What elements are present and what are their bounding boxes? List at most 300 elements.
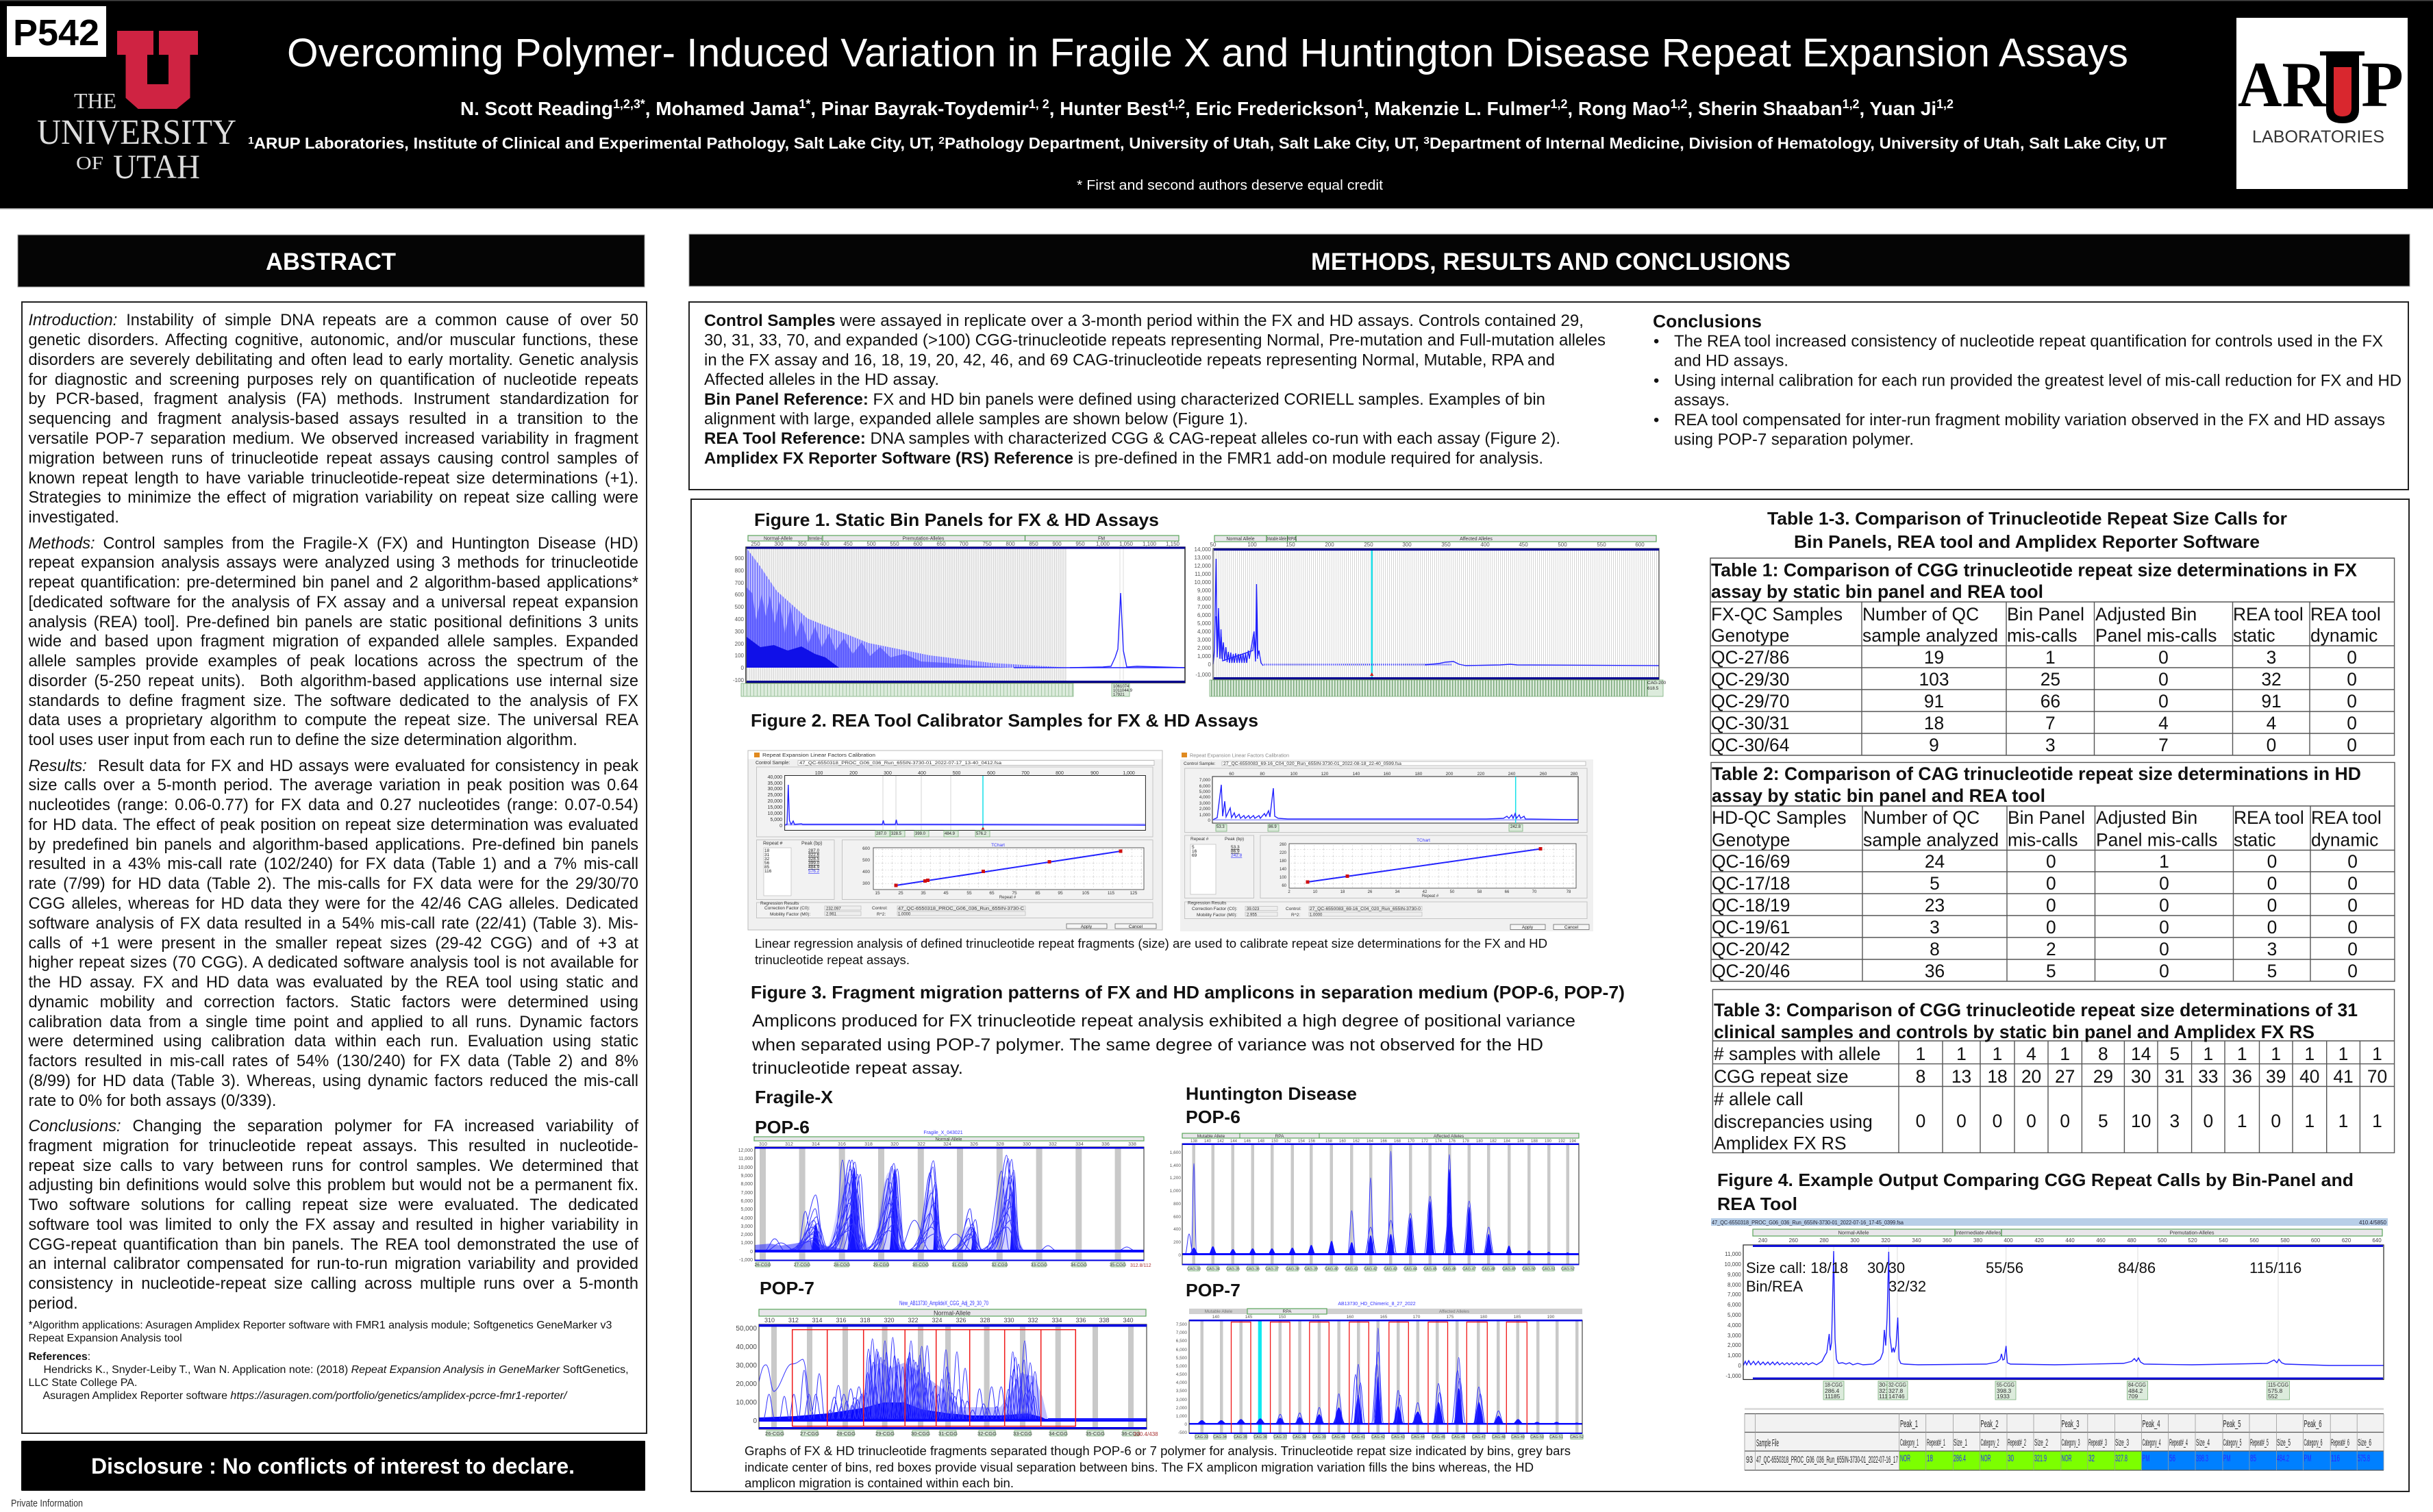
caption: figure 3: indicate center of bins, red boxes provide visual separation between bins. The FX amplicon migration variation fills the bins whereas, the HD [745, 1460, 1534, 1474]
peak labels: 115-CGG [2268, 1381, 2288, 1388]
chart: figure 4 example electropherogram: 520 [2188, 1237, 2197, 1244]
chart: Fragile X POP-7 overlay: 20,000 [736, 1381, 757, 1388]
chart: figure 2 HD calibration dialog: 39.023 [1247, 907, 1260, 911]
chart: figure 2 HD calibration dialog: 100 [1280, 876, 1287, 880]
chart: figure 1 FX static bin panel: 1,000 [1096, 541, 1110, 547]
chart: Fragile X POP-7 overlay: 310 [764, 1317, 775, 1324]
chart: Fragile X POP-6 overlay: 318 [864, 1142, 873, 1147]
size-call annotations: 115/116 [2249, 1259, 2301, 1276]
chart: Huntington POP-6 overlay: 168 [1394, 1139, 1401, 1144]
chart: figure 1 HD static bin panel: 7,000 [1197, 604, 1212, 610]
peak labels: 709 [2128, 1393, 2138, 1400]
chart: Fragile X POP-7 overlay: 318 [860, 1317, 871, 1324]
chart: figure 1 HD static bin panel: CAG-200 [1647, 681, 1666, 685]
chart: Huntington POP-6 overlay: 140 [1204, 1139, 1212, 1144]
chart: figure 2 FX calibration dialog: 125 [1130, 891, 1138, 896]
text: abstract body: genetic disorders. Affecting cognitive, autonomic, and/or muscular functions, these [29, 331, 638, 349]
text: abstract body [29, 312, 638, 1313]
chart: Huntington POP-7 overlay: CAG-46 [1451, 1435, 1465, 1439]
chart: figure 2 HD calibration dialog: 140 [1280, 868, 1287, 872]
chart: figure 2 FX calibration dialog: Mobility Factor (M0): [770, 912, 810, 917]
chart: figure 1 FX static bin panel: 450 [843, 541, 853, 547]
chart: figure 2 FX calibration dialog: Cancel [1129, 924, 1143, 929]
table: figure 4 peak output grid: Sample File [1756, 1437, 1779, 1449]
chart: Fragile X POP-6 overlay: 3,000 [740, 1224, 753, 1229]
authors: , Rong Mao [1567, 98, 1671, 119]
table 1: Bin Panel [2007, 604, 2084, 625]
chart: Huntington POP-6 overlay [1170, 1133, 1579, 1271]
chart: Huntington POP-6 overlay: 146 [1244, 1139, 1251, 1144]
table 1: QC-30/64 [1711, 735, 1789, 755]
chart: Huntington POP-6 overlay: CAG-47 [1462, 1267, 1476, 1271]
table 2: 5 [1930, 873, 1940, 894]
chart: Fragile X POP-7 overlay: 326 [956, 1317, 966, 1324]
chart: Fragile X POP-7 overlay: 36-CGG [1121, 1431, 1140, 1437]
chart: Huntington POP-6 overlay: 194 [1569, 1139, 1577, 1144]
table 1: REA tool [2310, 604, 2381, 625]
poster number: P542 [13, 12, 99, 53]
text: figure 3 description: Amplicons produced for FX trinucleotide repeat analysis exhibited a high degree of positional variance [752, 1011, 1575, 1031]
text: abstract body: factors resulted in mis-call rates of 54% (130/240) for FX data (Table 2) and 8% [29, 1053, 638, 1070]
chart: figure 4 example electropherogram: 47_QC-6550318_PROC_G06_036_Run_655IN-3730-01_2022-07-16_17-45_0399.fsa [1712, 1220, 1904, 1226]
chart: figure 4 example electropherogram: 300 [1850, 1237, 1860, 1244]
table 1: 0 [2347, 647, 2357, 668]
table 1: 91 [1924, 691, 1944, 711]
logo: University of Utah: UTAH [113, 147, 200, 186]
table 1 [1710, 558, 2395, 755]
table 3: 20 [2021, 1066, 2041, 1087]
chart: Huntington POP-6 overlay: 154 [1298, 1139, 1306, 1144]
chart: figure 2 HD calibration dialog: 0 [1208, 818, 1210, 823]
panel: methods and conclusions frame [689, 302, 2408, 490]
chart: Huntington POP-6 overlay: 186 [1517, 1139, 1525, 1144]
chart: Fragile X POP-7 overlay: 34-CGG [1049, 1431, 1068, 1437]
chart: figure 2 FX calibration dialog: 399.0 [808, 861, 820, 866]
table: figure 4 peak output grid: Repeat#_1 [1927, 1437, 1945, 1448]
table 3: 33 [2198, 1066, 2218, 1087]
chart: figure 1 FX static bin panel: -100 [733, 677, 745, 683]
table 3: 0 [2060, 1111, 2070, 1131]
table: figure 4 peak output grid: Category_1 [1900, 1437, 1919, 1448]
caption: figure 3 [745, 1444, 1571, 1490]
table 1: 7 [2158, 735, 2169, 755]
chart: figure 1 FX static bin panel: 300 [774, 541, 784, 547]
chart: Fragile X POP-6 overlay: 324 [943, 1142, 951, 1147]
chart: Huntington POP-6 overlay: 1,400 [1170, 1163, 1181, 1168]
chart: figure 2 HD calibration dialog: 18 [1340, 890, 1345, 894]
chart: figure 4 example electropherogram: 620 [2342, 1237, 2351, 1244]
table 2: 24 [1925, 851, 1945, 872]
table: figure 4 peak output grid: 321.9 [2034, 1452, 2047, 1463]
chart: Fragile X POP-6 overlay: 8,000 [740, 1182, 753, 1187]
disclosure banner: Disclosure : No conflicts of interest to declare. [91, 1454, 575, 1478]
table 1: 0 [2158, 691, 2169, 711]
chart: figure 1 HD static bin panel: 4,000 [1197, 629, 1212, 635]
table 1: Number of QC [1862, 604, 1979, 625]
chart: figure 2 FX calibration dialog: 18 [764, 848, 770, 853]
logo: ARUP Laboratories: AR [2238, 49, 2327, 121]
table 2: Number of QC [1863, 807, 1980, 828]
chart: Huntington POP-7 overlay: 0 [1184, 1422, 1187, 1427]
table 2: REA tool [2311, 807, 2382, 828]
chart: figure 2 HD calibration dialog: 7,000 [1199, 778, 1210, 783]
chart: figure 2 FX calibration dialog: 232.097 [826, 907, 841, 911]
label: Huntington Disease: Huntington Disease [1186, 1083, 1357, 1104]
chart: figure 2 FX calibration dialog: 10,000 [768, 811, 782, 816]
table 2: 0 [2267, 873, 2277, 894]
table 3: 31 [2164, 1066, 2184, 1087]
chart: figure 1 FX static bin panel: 900 [1052, 541, 1062, 547]
table 2: 0 [2267, 851, 2277, 872]
chart: figure 4 example electropherogram: 2,000 [1727, 1342, 1742, 1348]
chart: Huntington POP-6 overlay: CAG-39 [1304, 1267, 1318, 1271]
table: figure 4 peak output grid: Category_5 [2223, 1437, 2242, 1448]
peak labels: 84-CGG [2128, 1381, 2146, 1388]
chart: figure 2 HD calibration dialog [1180, 751, 1593, 931]
table 1: Adjusted Bin [2095, 604, 2197, 625]
chart: Huntington POP-7 overlay: 155 [1312, 1315, 1320, 1320]
peak labels [1823, 1381, 2289, 1400]
heading: tables 1-3 [1767, 508, 2287, 552]
chart: Huntington POP-7 overlay: CAG-47 [1472, 1435, 1486, 1439]
heading: tables 1-3: Table 1-3. Comparison of Trinucleotide Repeat Size Calls for [1767, 508, 2287, 529]
text: conclusions: The REA tool increased consistency of nucleotide repeat quantification for controls used in the FX [1674, 332, 2383, 351]
chart: figure 1 FX static bin panel: 400 [820, 541, 829, 547]
chart: figure 1 FX static bin panel: Premutation-Alleles [903, 537, 945, 541]
text: abstract body: investigated. [29, 509, 119, 527]
table: figure 4 peak output grid: Repeat#_5 [2250, 1437, 2269, 1448]
chart: figure 1 FX static bin panel: 900 [735, 555, 745, 562]
table 3: Amplidex FX RS [1714, 1133, 1847, 1153]
chart: figure 1 HD static bin panel: 100 [1247, 542, 1257, 548]
text: abstract body: dynamic mobility and correction factors. Static factors were determined using [29, 994, 638, 1011]
chart: figure 4 example electropherogram: -1,000 [1725, 1373, 1742, 1379]
affiliations: 1 [248, 135, 254, 147]
chart: figure 1 HD static bin panel: 1,000 [1197, 653, 1212, 659]
table: figure 4 peak output grid: NOR [1981, 1452, 1991, 1463]
chart: figure 1 HD static bin panel: 400 [1480, 542, 1490, 548]
chart: figure 2 HD calibration dialog: Cancel [1564, 925, 1579, 930]
chart: figure 2 FX calibration dialog [748, 751, 1162, 930]
chart: Huntington POP-7 overlay: 5,500 [1176, 1356, 1187, 1361]
chart: Fragile X POP-6 overlay: 35-CGG [1110, 1263, 1126, 1268]
chart: figure 2 HD calibration dialog: 50 [1450, 890, 1455, 894]
text: abstract body: known repeat length to have variable trinucleotide-repeat size determinations (+1). [29, 470, 638, 488]
peak labels: 484.2 [2128, 1387, 2143, 1394]
chart: figure 2 FX calibration dialog: 700 [1021, 771, 1030, 776]
chart: figure 2 HD calibration dialog: Repeat # [1190, 837, 1209, 842]
chart: Fragile X POP-7 overlay: 29-CGG [875, 1431, 895, 1437]
chart: figure 2 HD calibration dialog: Repeat # [1422, 894, 1439, 898]
chart: figure 2 HD calibration dialog: 240 [1508, 772, 1516, 777]
chart: figure 2 FX calibration dialog: 55 [966, 891, 972, 896]
chart: Fragile X POP-6 overlay: 316 [838, 1142, 846, 1147]
chart: Fragile X POP-7 overlay [736, 1300, 1158, 1437]
chart: figure 2 FX calibration dialog: Repeat # [763, 841, 783, 846]
chart: Huntington POP-7 overlay: CAG-48 [1492, 1435, 1506, 1439]
chart: Fragile X POP-7 overlay: 328 [980, 1317, 990, 1324]
chart: figure 2 FX calibration dialog: 47_QC-6550318_PROC_G06_036_Run_655IN-3730-01_2022-07-17_13-40_0412.fsa [799, 761, 1001, 766]
panel: abstract frame [22, 302, 647, 1433]
chart: Fragile X POP-6 overlay: 33-CGG [1031, 1263, 1047, 1268]
table 3: 1 [2060, 1044, 2070, 1064]
chart: Huntington POP-6 overlay: 192 [1558, 1139, 1566, 1144]
table 3: CGG repeat size [1714, 1066, 1849, 1087]
chart: Huntington POP-6 overlay: CAG-51 [1542, 1267, 1556, 1271]
text: abstract body: size calls over a 5-month period. The average variation in peak position was 0.64 [29, 777, 638, 794]
chart: Huntington POP-7 overlay: CAG-44 [1411, 1435, 1425, 1439]
affiliations: 3 [1423, 135, 1430, 147]
chart: figure 2 FX calibration dialog: 85 [764, 865, 770, 870]
chart: Huntington POP-7 overlay: CAG-34 [1213, 1435, 1227, 1439]
chart: figure 2 FX calibration dialog: Control: [872, 906, 888, 911]
text: abstract footnote and references: References: [29, 1351, 90, 1363]
chart: figure 2 HD calibration dialog: 70 [1532, 890, 1537, 894]
chart: figure 2 HD calibration dialog: Repeat Expansion Linear Factors Calibration [1190, 752, 1289, 759]
text: abstract body: Two software solutions for calling repeat size were evaluated. The dedicated [29, 1196, 638, 1214]
text: abstract body: tool uses user input from each run to define the size determination algorithm. [29, 731, 577, 749]
table 2: HD-QC Samples [1712, 807, 1847, 828]
table 3: 13 [1951, 1066, 1971, 1087]
table 1: 9 [1929, 735, 1939, 755]
chart: figure 2 HD calibration dialog: 5,000 [1199, 790, 1210, 794]
table 3: 18 [1987, 1066, 2008, 1087]
chart: figure 1 HD static bin panel: 5,000 [1197, 620, 1212, 627]
chart: Fragile X POP-7 overlay: 35-CGG [1086, 1431, 1105, 1437]
chart: figure 2 HD calibration dialog: 27_QC-6550083_69-16_C04_020_Run_655IN-3730-0 [1310, 907, 1421, 911]
table: figure 4 peak output grid: 30 [2008, 1452, 2014, 1463]
chart: figure 4 example electropherogram: 6,000 [1727, 1302, 1742, 1308]
chart: Fragile X POP-7 overlay: 32-CGG [977, 1431, 997, 1437]
text: conclusions: Using internal calibration for each run provided the greatest level of mis-call reduction for FX and HD [1674, 371, 2401, 390]
chart: Huntington POP-7 overlay: 175 [1447, 1315, 1454, 1320]
chart: figure 1 HD static bin panel: 250 [1364, 542, 1373, 548]
table 2: 0 [2046, 895, 2056, 916]
chart: Huntington POP-7 overlay: CAG-49 [1511, 1435, 1525, 1439]
table 2: 0 [2046, 917, 2056, 937]
table 2: 5 [2046, 961, 2056, 981]
table 3: 39 [2266, 1066, 2286, 1087]
chart: Huntington POP-7 overlay: 150 [1279, 1315, 1286, 1320]
table 3: 70 [2367, 1066, 2387, 1087]
chart: Huntington POP-6 overlay: 200 [1173, 1240, 1181, 1245]
table 1: assay by static bin panel and REA tool [1711, 581, 2043, 602]
chart: Huntington POP-7 overlay: 170 [1413, 1315, 1421, 1320]
text: abstract body: wide and based upon fragment migration of expanded allele samples. Expanded [29, 633, 638, 651]
chart: figure 2 HD calibration dialog: 58 [1477, 890, 1482, 894]
chart: figure 2 HD calibration dialog: 242.8 [1510, 825, 1521, 829]
chart: figure 2 HD calibration dialog: 34 [1395, 890, 1400, 894]
table 1: 3 [2045, 735, 2056, 755]
text: methods summary: 30, 31, 33, 70, and expanded (>100) CGG-trinucleotide repeats representing Normal, Pre-mutation and Full-mutation alleles [704, 331, 1606, 350]
table 2: 5 [2267, 961, 2277, 981]
table 2: 3 [1930, 917, 1940, 937]
table 2: Panel mis-calls [2096, 830, 2217, 850]
chart: figure 4 example electropherogram: 3,000 [1727, 1333, 1742, 1339]
chart: Fragile X POP-6 overlay: 10,000 [738, 1166, 753, 1170]
chart: figure 2 HD calibration dialog: 180 [1280, 859, 1287, 864]
table 2: assay by static bin panel and REA tool [1712, 785, 2045, 806]
chart: Huntington POP-7 overlay: CAG-33 [1195, 1435, 1208, 1439]
peak labels: 398.3 [1997, 1387, 2012, 1394]
table: figure 4 peak output grid: Category_2 [1981, 1437, 1999, 1448]
chart: figure 2 FX calibration dialog: R^2: [877, 912, 886, 917]
chart: figure 1 HD static bin panel: 618.5 [1647, 686, 1659, 691]
chart: figure 2 HD calibration dialog: 53.3 [1231, 845, 1240, 850]
chart: figure 2 HD calibration dialog: 86.9 [1269, 825, 1277, 829]
authors: 1,2 [1843, 97, 1860, 111]
authors: 1* [799, 97, 810, 111]
chart: Fragile X POP-6 overlay: 312.8/112 [1130, 1263, 1151, 1268]
table 2: 0 [2046, 851, 2056, 872]
table 1: QC-30/31 [1711, 713, 1789, 733]
table: figure 4 peak output grid: Peak_1 [1900, 1418, 1918, 1430]
table 1: 18 [1924, 713, 1944, 733]
chart: figure 2 FX calibration dialog: Repeat Expansion Linear Factors Calibration [762, 752, 875, 758]
table 2: 0 [2347, 851, 2358, 872]
authors: 1,2,3* [613, 97, 645, 111]
table 3: 4 [2026, 1044, 2036, 1064]
chart: figure 2 FX calibration dialog: 47_QC-6550318_PROC_G06_036_Run_655IN-3730-C [898, 907, 1025, 911]
table 3: 5 [2169, 1044, 2180, 1064]
text: figure 3 description: when separated using POP-7 polymer. The same degree of variance was not observed for the HD [751, 1035, 1543, 1055]
table 2: QC-16/69 [1712, 851, 1790, 872]
chart: Huntington POP-7 overlay: CAG-42 [1371, 1435, 1385, 1439]
chart: Huntington POP-6 overlay: 1,600 [1170, 1150, 1181, 1155]
table 1: 0 [2347, 669, 2357, 690]
logo: ARUP Laboratories: P [2361, 49, 2404, 121]
chart: figure 1 HD static bin panel: 14,000 [1195, 546, 1212, 553]
chart: figure 4 example electropherogram: 4,000 [1727, 1322, 1742, 1328]
table: figure 4 peak output grid: Size_6 [2358, 1437, 2371, 1448]
table: figure 4 peak output grid: 56 [2169, 1452, 2175, 1463]
chart: Huntington POP-6 overlay: 172 [1421, 1139, 1429, 1144]
chart: Fragile X POP-6 overlay: 334 [1075, 1142, 1084, 1147]
chart: Huntington POP-6 overlay: 166 [1380, 1139, 1388, 1144]
authors: , Sherin Shaaban [1688, 98, 1843, 119]
size-call annotations: 32/32 [1888, 1278, 1926, 1295]
chart: Huntington POP-6 overlay: 184 [1504, 1139, 1511, 1144]
authors: 1 [1357, 97, 1364, 111]
chart: figure 1 HD static bin panel: 50 [1210, 542, 1216, 548]
chart: figure 1 FX static bin panel: 800 [735, 568, 745, 574]
table: figure 4 peak output grid: 398.3 [2196, 1452, 2208, 1463]
table 1: Genotype [1711, 625, 1789, 646]
text: conclusions: • [1654, 332, 1659, 351]
chart: Fragile X POP-6 overlay: 32-CGG [991, 1263, 1008, 1268]
table 2: REA tool [2234, 807, 2304, 828]
chart: figure 4 example electropherogram: 500 [2158, 1237, 2167, 1244]
chart: figure 2 HD calibration dialog: 260 [1280, 843, 1287, 847]
chart: figure 4 example electropherogram: 10,000 [1725, 1261, 1742, 1268]
chart: Huntington POP-6 overlay: Mutable Allele [1197, 1134, 1225, 1139]
chart: Huntington POP-6 overlay: CAG-34 [1206, 1267, 1220, 1271]
chart: figure 2 FX calibration dialog: 20,000 [768, 799, 782, 804]
table 2: 0 [2347, 895, 2358, 916]
chart: figure 2 HD calibration dialog: 2.955 [1247, 914, 1258, 918]
logo: University of Utah: OF [76, 153, 103, 173]
chart: figure 2 FX calibration dialog: Apply [1081, 924, 1093, 929]
heading: tables 1-3: Bin Panels, REA tool and Amplidex Reporter Software [1794, 531, 2260, 552]
table 1: mis-calls [2007, 625, 2078, 646]
logo: University of Utah: UNIVERSITY [37, 113, 236, 152]
caption: figure 2 [755, 936, 1547, 967]
text: conclusions: REA tool compensated for inter-run fragment mobility variation observed in the FX and HD assays [1674, 411, 2385, 429]
chart: figure 2 HD calibration dialog: 60 [1229, 772, 1234, 777]
chart: figure 2 HD calibration dialog: 10 [1313, 890, 1318, 894]
table 3: Table 3: Comparison of CGG trinucleotide repeat size determinations of 31 [1714, 1000, 2358, 1020]
chart: figure 1 HD static bin panel: 10,000 [1195, 579, 1212, 585]
chart: Huntington POP-7 overlay: 4,000 [1176, 1381, 1187, 1385]
chart: Huntington POP-6 overlay: 156 [1308, 1139, 1316, 1144]
chart: figure 1 HD static bin panel: 300 [1402, 542, 1412, 548]
chart: figure 2 HD calibration dialog: 140 [1353, 772, 1360, 777]
chart: figure 2 HD calibration dialog: TChart [1417, 838, 1430, 843]
heading: figure 1: Figure 1. Static Bin Panels for FX & HD Assays [754, 509, 1159, 530]
table 3: 1 [2372, 1044, 2382, 1064]
table 3: 1 [1916, 1044, 1925, 1064]
chart: Huntington POP-6 overlay: 158 [1325, 1139, 1333, 1144]
table 3: 30 [2131, 1066, 2151, 1087]
peak labels: 14746 [1888, 1393, 1905, 1400]
chart: figure 2 FX calibration dialog: 15,000 [768, 805, 782, 810]
chart: figure 2 FX calibration dialog: 400 [918, 771, 926, 776]
chart: Huntington POP-7 overlay: CAG-39 [1312, 1435, 1326, 1439]
chart: Fragile X POP-6 overlay: 312 [785, 1142, 793, 1147]
chart: figure 1 HD static bin panel: Affected Alleles [1460, 537, 1493, 542]
text: abstract body: Methods: Control samples from the Fragile-X (FX) and Huntington Disease (HD) [29, 534, 638, 552]
table 3: 41 [2333, 1066, 2354, 1087]
chart: Fragile X POP-7 overlay: 312 [788, 1317, 799, 1324]
text: abstract body: by PCR-based, fragment analysis (FA) methods. Instrument standardization for [29, 390, 638, 408]
chart: Fragile X POP-7 overlay: 27-CGG [800, 1431, 819, 1437]
chart: Fragile X POP-6 overlay: 328 [996, 1142, 1004, 1147]
chart: figure 4 example electropherogram: 440 [2065, 1237, 2075, 1244]
chart: Huntington POP-6 overlay: 150 [1271, 1139, 1279, 1144]
table 3: 1 [1956, 1044, 1967, 1064]
chart: Huntington POP-6 overlay: CAG-37 [1265, 1267, 1279, 1271]
chart: figure 4 example electropherogram: 420 [2034, 1237, 2044, 1244]
text: figure 3 description [751, 1011, 1575, 1078]
text: abstract body: allele samples provide examples of peak locations across the spectrum of the [29, 653, 638, 670]
chart: Huntington POP-7 overlay: CAG-35 [1234, 1435, 1247, 1439]
chart: figure 4 example electropherogram: 320 [1881, 1237, 1891, 1244]
chart: figure 2 FX calibration dialog: 200 [849, 771, 858, 776]
table 2: 0 [2159, 873, 2169, 894]
chart: Huntington POP-6 overlay: CAG-33 [1187, 1267, 1201, 1271]
chart: figure 2 FX calibration dialog: 25,000 [768, 793, 782, 798]
chart: Fragile X POP-6 overlay: 332 [1049, 1142, 1057, 1147]
chart: Fragile X POP-6 overlay: 28-CGG [834, 1263, 850, 1268]
chart: figure 2 HD calibration dialog: Peak (bp) [1225, 837, 1244, 842]
caption: figure 3: amplicon migration is contained within each bin. [745, 1476, 1014, 1490]
chart: figure 4 example electropherogram: 240 [1758, 1237, 1768, 1244]
chart: Fragile X POP-7 overlay: 324 [932, 1317, 943, 1324]
text: abstract body: resulted in a 43% mis-call rate (102/240) for FX data (Table 1) and a 7% mis-call [29, 855, 638, 873]
caption: figure 2: trinucleotide repeat assays. [755, 953, 910, 967]
chart: figure 2 FX calibration dialog: 300 [862, 881, 870, 886]
table 3: 36 [2232, 1066, 2252, 1087]
table: figure 4 peak output grid [1745, 1408, 2384, 1470]
text: conclusions: and HD assays. [1674, 352, 1788, 370]
chart: figure 1 FX static bin panel: 300 [735, 629, 745, 635]
table 2: 0 [2347, 961, 2358, 981]
chart: Huntington POP-6 overlay: CAG-36 [1246, 1267, 1260, 1271]
table 2: 2 [2046, 939, 2056, 959]
chart: Huntington POP-6 overlay: CAG-44 [1403, 1267, 1417, 1271]
table 3: discrepancies using [1714, 1111, 1873, 1132]
chart: figure 2 HD calibration dialog: 1.0000 [1310, 914, 1323, 918]
